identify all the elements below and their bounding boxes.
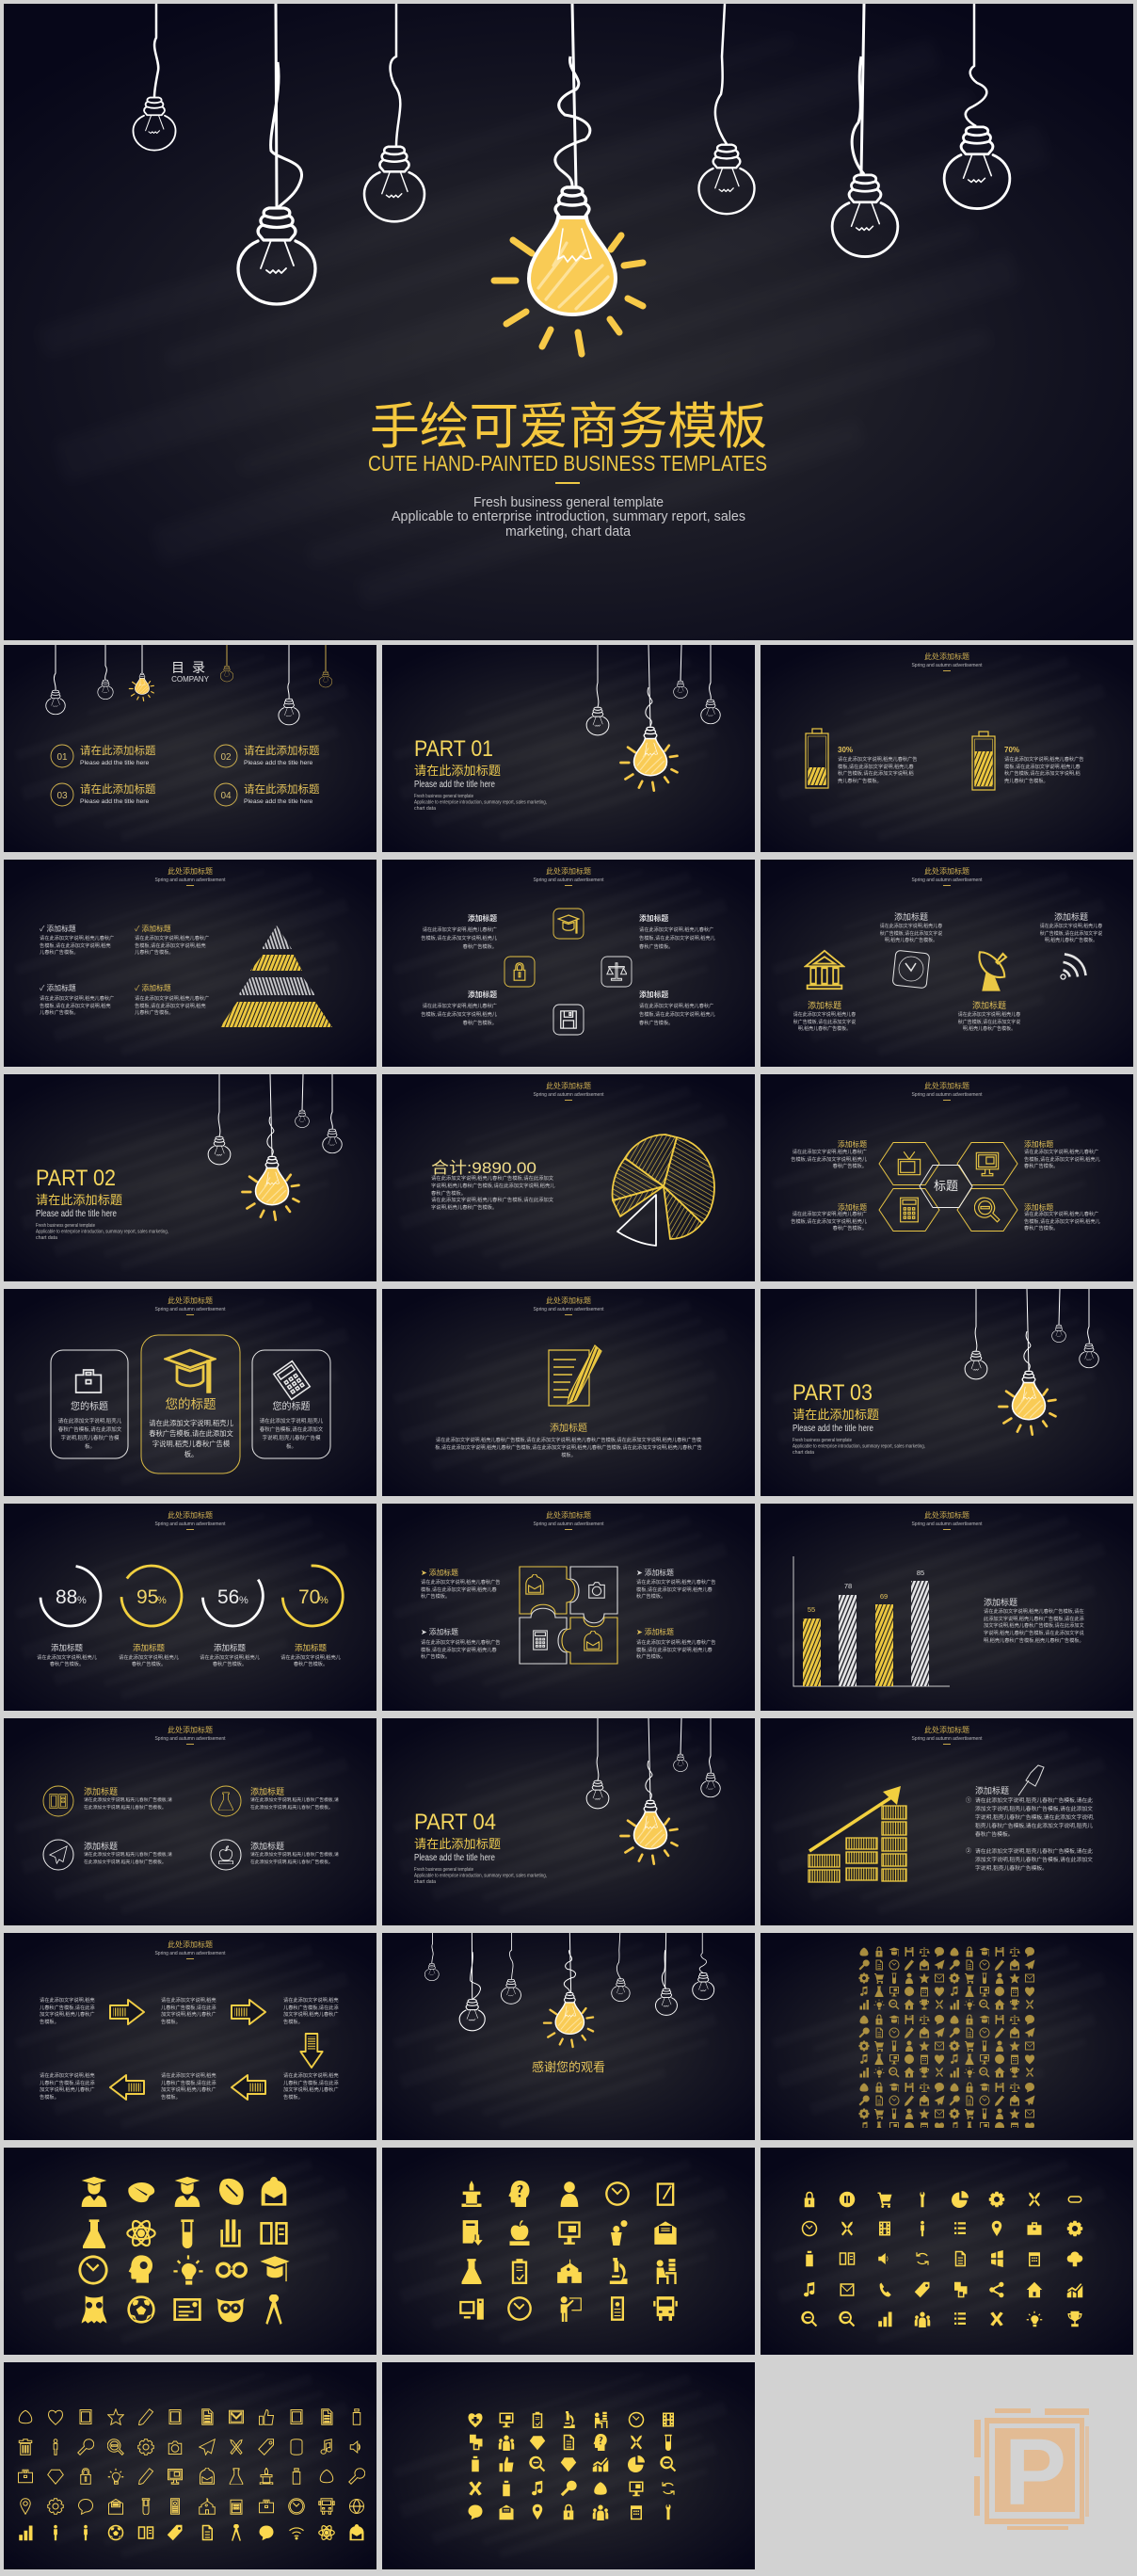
header: 此处添加标题 [546,1296,591,1305]
panel: hero cover slide [4,4,1133,640]
item 1: Please add the title here [80,759,149,766]
panel: outline icons slide [4,2362,376,2569]
hanging bulbs [586,645,720,791]
title: 添加标题 [894,912,928,922]
ring caption [280,1643,341,1667]
title: 添加标题 [639,914,668,923]
description text [392,494,745,539]
title: 添加标题 [639,990,668,999]
panel: puzzle slide [382,1504,755,1711]
header [154,1726,226,1745]
panel: part 03 slide [761,1289,1133,1496]
header [154,867,226,886]
number badges: 01 [56,752,68,763]
header: Spring and autumn advertisement [911,877,983,883]
part text: Fresh business general template [793,1438,852,1443]
text block: 请在此添加文字说明,稻壳儿春秋广告模板,请在此添加文字说明,稻壳儿春秋广告模板。 [40,996,114,1016]
item 4 [244,783,320,804]
icon box: mortarboard [553,909,584,939]
title: 添加标题 [838,1140,867,1149]
item: 添加标题 [84,1787,118,1796]
header: 此处添加标题 [924,867,969,876]
item: 添加标题 [250,1787,284,1796]
flow arrows [110,2000,323,2100]
part text [414,1810,547,1885]
ring 56%: % [239,1595,248,1606]
icon box: scales [601,957,632,987]
panel: arrows flow slide [4,1933,376,2140]
panel: thank you slide [382,1933,755,2140]
icon grid: interface [801,2191,1082,2327]
card title: 您的标题 [71,1402,108,1412]
contents heading: 目录 [171,660,213,675]
ring caption: 请在此添加文字说明,稻壳儿春秋广告模板。 [37,1655,97,1667]
title: 添加标题 [550,1424,587,1434]
part text: chart data [414,1879,436,1885]
bar chart: 69 [880,1592,888,1601]
text block: 请在此添加文字说明,稻壳儿春秋广告模板,请在此添加文字说明,稻壳儿春秋广告模板。 [421,1004,497,1026]
thank you text: 感谢您的观看 [532,2060,605,2074]
icon grid: mixed [469,2411,676,2520]
panel: mixed icons slide [382,2362,755,2569]
card text: 请在此添加文字说明,稻壳儿春秋广告模板,请在此添加文字说明,稻壳儿春秋广告模板。 [58,1419,121,1450]
panel: hexagon slide [761,1074,1133,1281]
header: 此处添加标题 [168,867,213,876]
header: 此处添加标题 [546,1082,591,1090]
battery 70% [972,732,995,790]
header: Spring and autumn advertisement [154,1307,226,1312]
text block: 请在此添加文字说明,稻壳儿春秋广告模板,请在此添加文字说明,稻壳儿春秋广告模板。 [40,2073,95,2101]
ring 56% [202,1580,263,1626]
text block: 请在此添加文字说明,稻壳儿春秋广告模板,请在此添加文字说明,稻壳儿春秋广告模板。 [958,1012,1020,1032]
text block: 请在此添加文字说明,稻壳儿春秋广告模板,请在此添加文字说明,稻壳儿春秋广告模板。 [283,1998,339,2025]
panel: growth chart slide [761,1718,1133,1925]
title: 添加标题 [1054,912,1088,922]
text block: 请在此添加文字说明,稻壳儿春秋广告模板,请在此添加文字说明,稻壳儿春秋广告模板。 [793,1012,856,1032]
part text: chart data [36,1235,57,1241]
label 30%: 30% [838,746,853,754]
part text: Please add the title here [36,1209,117,1219]
icon: briefcase [76,1370,101,1393]
bar chart [793,1556,950,1686]
item: ✓ 添加标题 [40,984,76,992]
card center [141,1335,240,1473]
panel: four circle icons slide [4,1718,376,1925]
text block: 请在此添加文字说明,稻壳儿春秋广告模板,请在此添加文字说明,稻壳儿春秋广告模板,请在此添加文字说明,稻壳儿春秋广告模板,请在此添加文字说明,稻壳儿春秋广告模板,请在此添加文字说明,稻壳儿春秋广告模板,稻壳儿春秋广告模板。 [984,1609,1084,1644]
text block: 请在此添加文字说明,稻壳儿春秋广告模板,请在此添加文字说明,稻壳儿春秋广告模板。 [421,927,497,950]
growth arrow [809,1786,901,1851]
part text: Applicable to enterprise introduction, summary report, sales marketing, [36,1230,168,1235]
icon row: filled [19,2524,363,2541]
panel: table of contents slide [4,645,376,852]
panel: note and pencil slide [382,1289,755,1496]
icon: wifi [1050,950,1090,990]
ring caption: 添加标题 [133,1643,165,1652]
text block: 请在此添加文字说明,稻壳儿春秋广告模板,请在此添加文字说明,稻壳儿春秋广告模板。 [1024,1150,1100,1169]
stacked blocks [809,1806,906,1882]
item: 请在此添加文字说明,稻壳儿春秋广告模板,请在此添加文字说明,稻壳儿春秋广告模板。 [84,1853,172,1865]
pyramid chart [220,926,332,1027]
text block: 请在此添加文字说明,稻壳儿春秋广告模板,请在此添加文字说明,稻壳儿春秋广告模板。 [1040,924,1102,943]
header: 此处添加标题 [924,1511,969,1520]
icon: clock [892,950,930,989]
panel: bar chart slide [761,1504,1133,1711]
header: Spring and autumn advertisement [533,1092,604,1098]
panel: education icons slide [4,2148,376,2355]
ring caption: 添加标题 [51,1643,83,1652]
text block: 请在此添加文字说明,稻壳儿春秋广告模板,请在此添加文字说明,稻壳儿春秋广告模板。 [1024,1212,1100,1232]
title: 添加标题 [984,1598,1017,1607]
part text [793,1380,925,1456]
part text: PART 04 [414,1810,496,1835]
header: 此处添加标题 [546,1511,591,1520]
header [911,652,983,671]
header [911,867,983,886]
ring caption [200,1643,260,1667]
number badges: 04 [220,791,232,801]
bar chart: 78 [844,1582,852,1590]
bullet two: 请在此添加文字说明,稻壳儿春秋广告模板,请在此添加文字说明,稻壳儿春秋广告模板,请在此添加文字说明,稻壳儿春秋广告模板。 [975,1849,1093,1872]
part text: Fresh business general template [36,1223,95,1229]
header: 此处添加标题 [924,652,969,661]
header [154,1511,226,1530]
part text: Applicable to enterprise introduction, summary report, sales marketing, [414,1874,547,1879]
hanging bulbs [586,1718,720,1864]
logo watermark [974,2408,1089,2530]
part text: PART 01 [414,736,493,762]
total value: 合计:9890.00 [431,1159,536,1177]
title: 添加标题 [468,914,497,923]
icon grid: outline [19,2409,365,2515]
bullet one marker: ① [966,1798,971,1804]
battery 30% [806,729,828,788]
part text: 请在此添加标题 [414,1837,501,1851]
item: ✓ 添加标题 [135,925,171,933]
card right [252,1350,330,1458]
number badges: 02 [220,752,232,763]
item 3 [80,783,156,804]
panel: part 02 slide [4,1074,376,1281]
part text: Please add the title here [414,780,495,790]
icon: mortarboard [166,1350,215,1392]
item 1: 请在此添加标题 [80,746,156,757]
panel: four icon boxes slide [382,860,755,1067]
part text: Applicable to enterprise introduction, summary report, sales marketing, [414,800,547,806]
header: Spring and autumn advertisement [154,1521,226,1527]
header: 此处添加标题 [546,867,591,876]
icon: satellite dish [979,952,1006,990]
item: 请在此添加文字说明,稻壳儿春秋广告模板,请在此添加文字说明,稻壳儿春秋广告模板。 [250,1798,339,1811]
ring caption: 请在此添加文字说明,稻壳儿春秋广告模板。 [200,1655,260,1667]
header: 此处添加标题 [168,1511,213,1520]
part text: PART 03 [793,1380,873,1406]
description text: marketing, chart data [505,523,632,539]
header: 此处添加标题 [924,1082,969,1090]
icon: temple [806,951,843,989]
header: Spring and autumn advertisement [154,1951,226,1956]
item [84,1842,172,1865]
ring caption: 添加标题 [295,1643,327,1652]
part text: chart data [793,1450,814,1456]
item [250,1787,339,1811]
header [911,1082,983,1101]
header: Spring and autumn advertisement [533,877,604,883]
part text: 请在此添加标题 [414,764,501,778]
header: Spring and autumn advertisement [533,1521,604,1527]
text block: 请在此添加文字说明,稻壳儿春秋广告模板,请在此添加文字说明,稻壳儿春秋广告模板。 [135,996,209,1016]
item: ➤ 添加标题 [421,1628,458,1636]
part text: Fresh business general template [414,794,473,799]
part text: 请在此添加标题 [793,1408,879,1422]
text block: 请在此添加文字说明,稻壳儿春秋广告模板,请在此添加文字说明,稻壳儿春秋广告模板。 [40,936,114,956]
number badges [51,745,237,806]
text block: 请在此添加文字说明,稻壳儿春秋广告模板,请在此添加文字说明,稻壳儿春秋广告模板。 [791,1150,867,1169]
item: 添加标题 [250,1842,284,1851]
item: ➤ 添加标题 [421,1569,458,1577]
short divider [555,482,580,484]
item 2: Please add the title here [244,759,312,766]
item 3: 请在此添加标题 [80,784,156,796]
company label: COMPANY [171,675,209,684]
part text: Please add the title here [414,1853,495,1863]
panel: four hand-drawn icons slide [761,860,1133,1067]
ring 88%: % [77,1595,87,1606]
icon: paper plane [43,1840,73,1870]
ring caption: 添加标题 [214,1643,246,1652]
icon: apple [211,1840,241,1870]
item: 添加标题 [84,1842,118,1851]
text block: 请在此添加文字说明,稻壳儿春秋广告模板,请在此添加文字说明,稻壳儿春秋广告模板。 [880,924,942,943]
title: 手绘可爱商务模板 [370,399,767,455]
header: 此处添加标题 [168,1726,213,1734]
ring 95%: % [157,1595,167,1606]
text block: 请在此添加文字说明,稻壳儿春秋广告模板,请在此添加文字说明,稻壳儿春秋广告模板,请在此添加文字说明,稻壳儿春秋广告模板。 [431,1176,555,1197]
hanging bulbs [46,645,332,725]
icon: book [43,1786,73,1816]
icon: flask [211,1786,241,1816]
text block: 请在此添加文字说明,稻壳儿春秋广告模板,请在此添加文字说明,稻壳儿春秋广告模板。 [636,1580,715,1600]
part text: 请在此添加标题 [36,1193,122,1207]
title: 添加标题 [1024,1140,1053,1149]
label 70%: 70% [1004,746,1019,754]
text block: 请在此添加文字说明,稻壳儿春秋广告模板,请在此添加文字说明,稻壳儿春秋广告模板。 [40,1998,95,2025]
text block: 请在此添加文字说明,稻壳儿春秋广告模板,请在此添加文字说明,稻壳儿春秋广告模板。 [421,1640,500,1660]
part text: Fresh business general template [414,1867,473,1873]
ring caption [37,1643,97,1667]
text block: 请在此添加文字说明,稻壳儿春秋广告模板,请在此添加文字说明,稻壳儿春秋广告模板,请在此添加文字说明,稻壳儿春秋广告模板,请在此添加文字说明,稻壳儿春秋广告模板,请在此添加文字说明,稻壳儿春秋广告模板,请在此添加文字说明,稻壳儿春秋广告模板。 [435,1438,702,1458]
bullet two marker: ② [966,1849,971,1855]
hanging light bulbs illustration [133,4,1010,354]
header: 此处添加标题 [168,1940,213,1949]
header: Spring and autumn advertisement [154,877,226,883]
part text [36,1166,168,1241]
item: ✓ 添加标题 [135,984,171,992]
description text: Fresh business general template [473,494,664,510]
ring 70%: 70 [298,1586,320,1608]
item [250,1842,339,1865]
item: 请在此添加文字说明,稻壳儿春秋广告模板,请在此添加文字说明,稻壳儿春秋广告模板。 [250,1853,339,1865]
header [533,1082,604,1101]
icon: push pin [1018,1765,1044,1795]
part text [414,736,547,812]
center label: 标题 [934,1179,958,1193]
text block: 请在此添加文字说明,稻壳儿春秋广告模板,请在此添加文字说明,稻壳儿春秋广告模板。 [161,2073,216,2101]
title: 添加标题 [808,1001,841,1010]
text block: 请在此添加文字说明,稻壳儿春秋广告模板,请在此添加文字说明,稻壳儿春秋广告模板。 [161,1998,216,2025]
hanging bulbs [208,1074,342,1220]
hanging bulbs [424,1933,714,2047]
card text: 请在此添加文字说明,稻壳儿春秋广告模板,请在此添加文字说明,稻壳儿春秋广告模板。 [149,1419,233,1458]
part text: Please add the title here [793,1424,873,1434]
header: 此处添加标题 [168,1296,213,1305]
text block: 请在此添加文字说明,稻壳儿春秋广告模板,请在此添加文字说明,稻壳儿春秋广告模板。 [636,1640,715,1660]
ring caption: 请在此添加文字说明,稻壳儿春秋广告模板。 [280,1655,341,1667]
ring 70%: % [319,1595,328,1606]
part text: PART 02 [36,1166,116,1191]
item 2 [244,745,320,766]
header: Spring and autumn advertisement [911,663,983,668]
header: 此处添加标题 [924,1726,969,1734]
ring 95% [121,1566,182,1626]
header [154,1296,226,1315]
hanging bulbs [965,1289,1098,1435]
ring 88% [40,1567,101,1626]
text block: 请在此添加文字说明,稻壳儿春秋广告模板,请在此添加文字说明,稻壳儿春秋广告模板。 [135,936,209,956]
header: Spring and autumn advertisement [911,1736,983,1742]
panel: interface icons slide [761,2148,1133,2355]
description text: Applicable to enterprise introduction, summary report, sales [392,508,745,524]
text block [431,1175,555,1211]
panel: icon cloud slide [761,1933,1133,2140]
panel: pyramid slide [4,860,376,1067]
text block: 请在此添加文字说明,稻壳儿春秋广告模板,请在此添加文字说明,稻壳儿春秋广告模板。 [431,1198,553,1211]
item 4: 请在此添加标题 [244,784,320,796]
title: 添加标题 [975,1786,1009,1795]
item 2: 请在此添加标题 [244,746,320,757]
header: Spring and autumn advertisement [533,1307,604,1312]
header [154,1940,226,1959]
title: 添加标题 [1024,1203,1053,1212]
text block: 请在此添加文字说明,稻壳儿春秋广告模板,请在此添加文字说明,稻壳儿春秋广告模板,请在此添加文字说明,稻壳儿春秋广告模板。 [1004,757,1083,784]
panel: three cards slide [4,1289,376,1496]
bullet one: 请在此添加文字说明,稻壳儿春秋广告模板,请在此添加文字说明,稻壳儿春秋广告模板,请在此添加文字说明,稻壳儿春秋广告模板,请在此添加文字说明,稻壳儿春秋广告模板,请在此添加文字说明,稻壳儿春秋广告模板。 [975,1798,1095,1838]
icon box: lock [504,957,535,987]
card title: 您的标题 [273,1402,311,1412]
hexagon cluster [879,1143,1017,1232]
ring 88%: 88 [56,1586,77,1608]
item [84,1787,172,1811]
part text: chart data [414,806,436,812]
item: ➤ 添加标题 [636,1628,674,1636]
panel: pie chart slide [382,1074,755,1281]
item: ➤ 添加标题 [636,1569,674,1577]
title: 添加标题 [972,1001,1006,1010]
puzzle pieces [520,1567,617,1664]
header: Spring and autumn advertisement [154,1736,226,1742]
header [533,1296,604,1315]
header [911,1511,983,1530]
text block: 请在此添加文字说明,稻壳儿春秋广告模板,请在此添加文字说明,稻壳儿春秋广告模板。 [639,927,715,950]
header [533,867,604,886]
ring 95%: 95 [136,1586,158,1608]
header [911,1726,983,1745]
card text: 请在此添加文字说明,稻壳儿春秋广告模板,请在此添加文字说明,稻壳儿春秋广告模板。 [260,1419,323,1450]
header: Spring and autumn advertisement [911,1521,983,1527]
card left [51,1350,128,1458]
ring 70% [282,1566,343,1626]
text block: 请在此添加文字说明,稻壳儿春秋广告模板,请在此添加文字说明,稻壳儿春秋广告模板。 [283,2073,339,2101]
title: 添加标题 [838,1203,867,1212]
icon grid: education [78,2177,290,2325]
bar chart: 55 [808,1605,815,1614]
logo watermark: P [1004,2420,1066,2525]
header [533,1511,604,1530]
ring caption: 请在此添加文字说明,稻壳儿春秋广告模板。 [119,1655,179,1667]
item 4: Please add the title here [244,798,312,804]
text block: 请在此添加文字说明,稻壳儿春秋广告模板,请在此添加文字说明,稻壳儿春秋广告模板。 [639,1004,715,1026]
item: ✓ 添加标题 [40,925,76,933]
panel: part 04 slide [382,1718,755,1925]
ring caption [119,1643,179,1667]
item 3: Please add the title here [80,798,149,804]
panel: school icons slide [382,2148,755,2355]
icon box: floppy [553,1005,584,1035]
panel: battery chart slide [761,645,1133,852]
bar chart: 85 [917,1569,924,1577]
part text: Applicable to enterprise introduction, summary report, sales marketing, [793,1444,925,1450]
icon cloud [857,1945,1038,2128]
header: Spring and autumn advertisement [911,1092,983,1098]
icon: calculator [274,1361,310,1399]
hand-drawn pie chart [613,1135,714,1246]
icon: note with pencil [549,1345,601,1406]
subtitle: CUTE HAND-PAINTED BUSINESS TEMPLATES [368,451,767,475]
item 1 [80,745,156,766]
panel: part 01 slide [382,645,755,852]
number badges: 03 [56,791,68,801]
text block: 请在此添加文字说明,稻壳儿春秋广告模板,请在此添加文字说明,稻壳儿春秋广告模板。 [791,1212,867,1232]
title: 添加标题 [468,990,497,999]
item: 请在此添加文字说明,稻壳儿春秋广告模板,请在此添加文字说明,稻壳儿春秋广告模板。 [84,1798,172,1811]
ring 56%: 56 [217,1586,239,1608]
text block: 请在此添加文字说明,稻壳儿春秋广告模板,请在此添加文字说明,稻壳儿春秋广告模板。 [421,1580,500,1600]
card title: 您的标题 [166,1397,216,1411]
text block: 请在此添加文字说明,稻壳儿春秋广告模板,请在此添加文字说明,稻壳儿春秋广告模板,请在此添加文字说明,稻壳儿春秋广告模板。 [838,757,917,784]
icon grid: school [459,2181,678,2322]
panel: progress rings slide [4,1504,376,1711]
